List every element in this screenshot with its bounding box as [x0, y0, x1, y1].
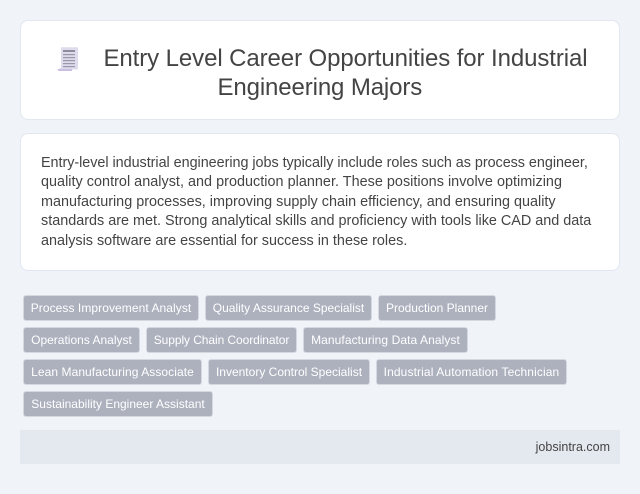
tag: Production Planner: [386, 301, 488, 315]
tag: [378, 295, 496, 321]
tag: [146, 327, 297, 353]
tag: [208, 359, 370, 385]
panel: title card: [20, 20, 620, 120]
tag: Industrial Automation Technician: [384, 365, 559, 379]
description text: Entry-level industrial engineering jobs typically include roles such as process engineer,: [41, 155, 588, 171]
tag: [303, 327, 468, 353]
description text: quality control analyst, and production planner. These positions involve optimizing: [41, 174, 562, 190]
tag: [23, 391, 213, 417]
tag: Sustainability Engineer Assistant: [31, 397, 205, 411]
title line 2: Engineering Majors: [218, 74, 422, 101]
tag: Inventory Control Specialist: [216, 365, 362, 379]
footer bar: [20, 430, 620, 464]
tag: [23, 295, 199, 321]
description text: [41, 155, 592, 249]
description text: manufacturing processes, improving supply chain efficiency, and ensuring quality: [41, 194, 556, 210]
panel: description card: [20, 133, 620, 271]
description text: analysis software are essential for success in these roles.: [41, 233, 407, 249]
tag: Quality Assurance Specialist: [213, 301, 364, 315]
tag: Lean Manufacturing Associate: [31, 365, 194, 379]
description text: standards are met. Strong analytical skills and proficiency with tools like CAD and data: [41, 213, 591, 229]
tag: Manufacturing Data Analyst: [311, 333, 460, 347]
title line 1: Entry Level Career Opportunities for Industrial: [104, 45, 588, 72]
tag: [205, 295, 372, 321]
tag: Process Improvement Analyst: [31, 301, 191, 315]
footer source text: jobsintra.com: [536, 440, 610, 454]
tag: [23, 327, 140, 353]
icon: document scroll: [58, 47, 78, 71]
tag: [23, 359, 202, 385]
tag: Supply Chain Coordinator: [154, 333, 289, 347]
tag: Operations Analyst: [31, 333, 132, 347]
tag: [376, 359, 567, 385]
tag list: [23, 295, 567, 417]
